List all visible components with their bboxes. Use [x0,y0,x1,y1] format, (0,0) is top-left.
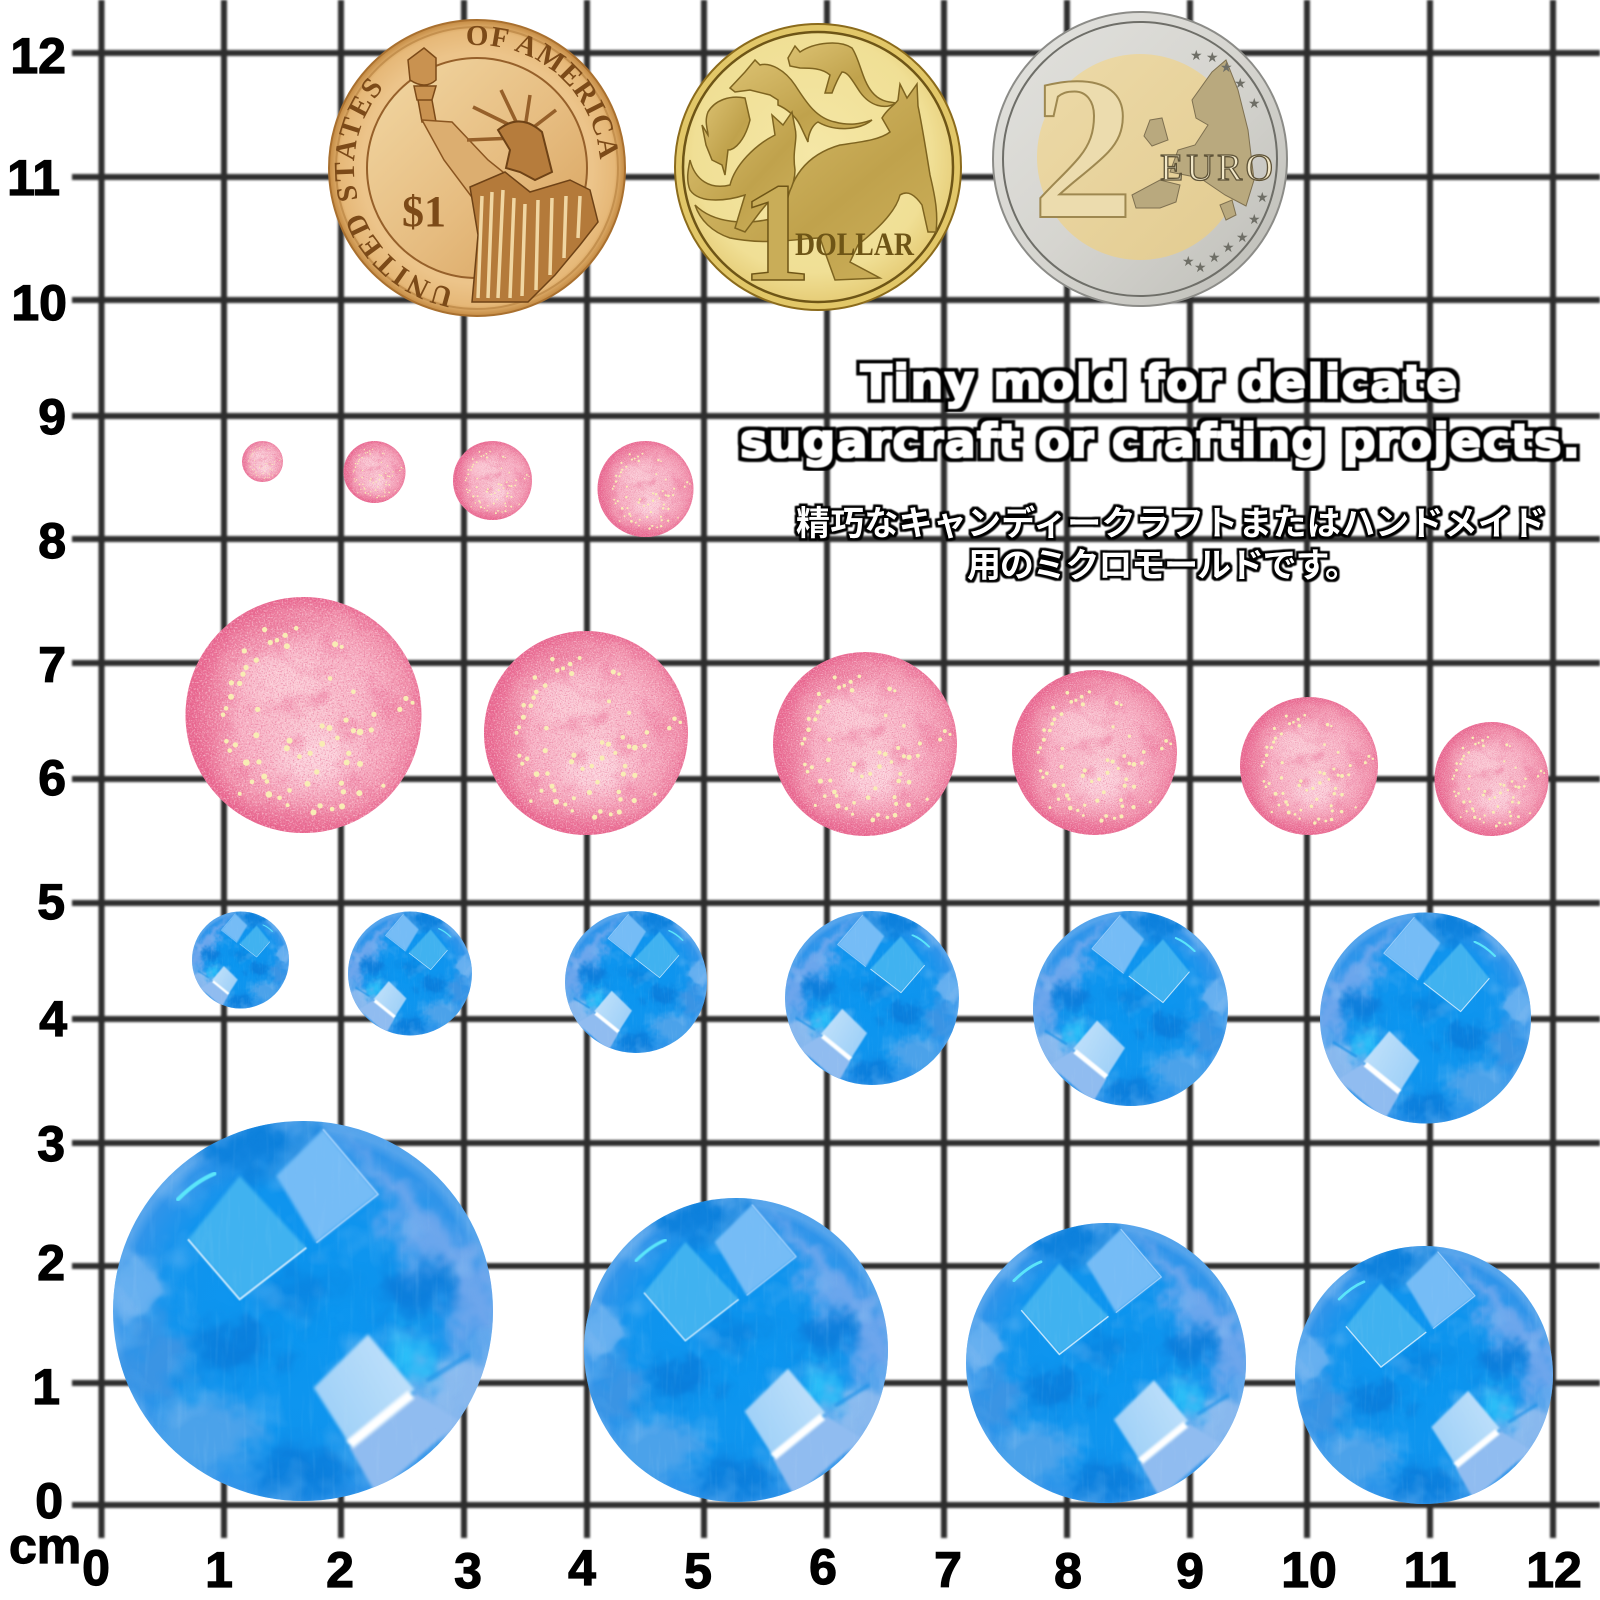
pink cabochon 5 [186,597,422,833]
pink cabochon 1 [242,441,283,482]
blue cabochon 10 [1293,1246,1553,1504]
horizontal axis labels: 11 [1404,1542,1456,1598]
vertical axis labels: 11 [7,150,60,206]
map of Europe [1132,60,1254,220]
unit label cm: cm [9,1518,81,1574]
heading Japanese: 精巧なキャンディークラフトまたはハンドメイド [796,504,1546,543]
vertical axis labels [7,28,67,1529]
vertical axis labels: 12 [10,28,66,84]
heading English: sugarcraft or crafting projects. [740,414,1580,468]
vertical axis labels: 2 [37,1235,65,1291]
vertical axis labels: 3 [37,1116,65,1172]
EURO word: EURO [1160,147,1273,189]
horizontal axis labels: 6 [809,1539,837,1595]
horizontal axis labels: 3 [454,1543,482,1599]
kangaroo large [695,84,937,280]
numeral 2: 2 [1032,35,1134,262]
blue cabochon 7 [110,1121,493,1501]
vertical axis labels: 1 [32,1359,60,1415]
denomination $1: $1 [402,187,446,236]
heading English: Tiny mold for delicate [860,355,1458,409]
pink cabochon 7 [773,652,957,836]
ring of stars: ★ [1248,96,1261,112]
pink cabochon 2 [344,441,406,503]
statue arm [422,120,508,200]
ring of stars: ★ [1190,48,1203,64]
pink cabochon 8 [1012,670,1177,835]
crown rays [467,90,556,140]
row: medium blue cabochons [192,911,1533,1124]
torch [408,48,436,122]
robe folds [478,190,580,298]
horizontal axis labels: 5 [684,1543,712,1599]
blue cabochon 5 [1033,911,1230,1106]
vertical axis labels: 5 [37,874,65,930]
denomination 1: 1 [740,153,812,311]
horizontal axis labels: 10 [1281,1542,1337,1598]
ring of stars: ★ [1222,240,1235,256]
vertical axis labels: 7 [38,637,66,693]
blue cabochon 2 [348,912,473,1036]
pink cabochon 4 [598,441,694,537]
ring of stars [1182,48,1269,276]
blue cabochon 8 [581,1198,888,1502]
vertical axis labels: 6 [38,750,66,806]
pink cabochon 9 [1240,697,1378,835]
kangaroo second [730,60,872,142]
ring of stars: ★ [1194,260,1207,276]
horizontal axis labels: 4 [568,1540,596,1596]
horizontal axis labels: 1 [205,1542,233,1598]
ring of stars: ★ [1182,254,1195,270]
coin legend text: UNITED STATES [334,78,450,308]
heading English [740,355,1580,468]
ring of stars: ★ [1236,230,1249,246]
horizontal axis labels: 7 [934,1542,962,1598]
coin: two euro [993,12,1287,306]
pink cabochon 3 [453,441,532,520]
ring of stars: ★ [1248,212,1261,228]
horizontal axis labels: 9 [1176,1543,1204,1599]
row: large pink cabochons [186,597,1548,836]
coin legend text top: OF AMERICA [467,26,618,160]
blue cabochon 4 [785,911,961,1085]
vertical axis labels: 8 [38,513,66,569]
ring of stars: ★ [1208,250,1221,266]
ring of stars: ★ [1206,50,1219,66]
horizontal axis labels [82,1539,1582,1599]
vertical axis labels: 10 [11,275,67,331]
coin: US one dollar [328,19,626,317]
horizontal axis labels: 2 [326,1542,354,1598]
vertical axis labels: 4 [39,991,67,1047]
row: large blue cabochons [110,1121,1553,1504]
heading Japanese: 用のミクロモールドです。 [967,547,1359,585]
DOLLAR word: DOLLAR [795,227,915,263]
row: small pink cabochons [242,441,694,537]
blue cabochon 1 [192,912,290,1008]
kangaroo medium [688,112,796,232]
pink cabochon 10 [1434,722,1548,836]
heading Japanese [796,504,1546,585]
blue cabochon 3 [565,911,708,1053]
coin: Australian one dollar [675,24,961,311]
vertical axis labels: 9 [38,389,66,445]
pink cabochon 6 [484,631,688,835]
horizontal axis labels: 0 [82,1540,110,1596]
vertical axis labels: 0 [35,1473,63,1529]
kangaroo top [788,43,896,106]
ring of stars: ★ [1256,190,1269,206]
ring of stars: ★ [1220,60,1233,76]
statue robe [470,172,598,302]
kangaroo left [702,97,750,175]
blue cabochon 9 [964,1223,1246,1503]
blue cabochon 6 [1320,912,1533,1124]
ring of stars: ★ [1234,76,1247,92]
horizontal axis labels: 12 [1526,1542,1582,1598]
statue head [498,121,552,180]
horizontal axis labels: 8 [1054,1543,1082,1599]
